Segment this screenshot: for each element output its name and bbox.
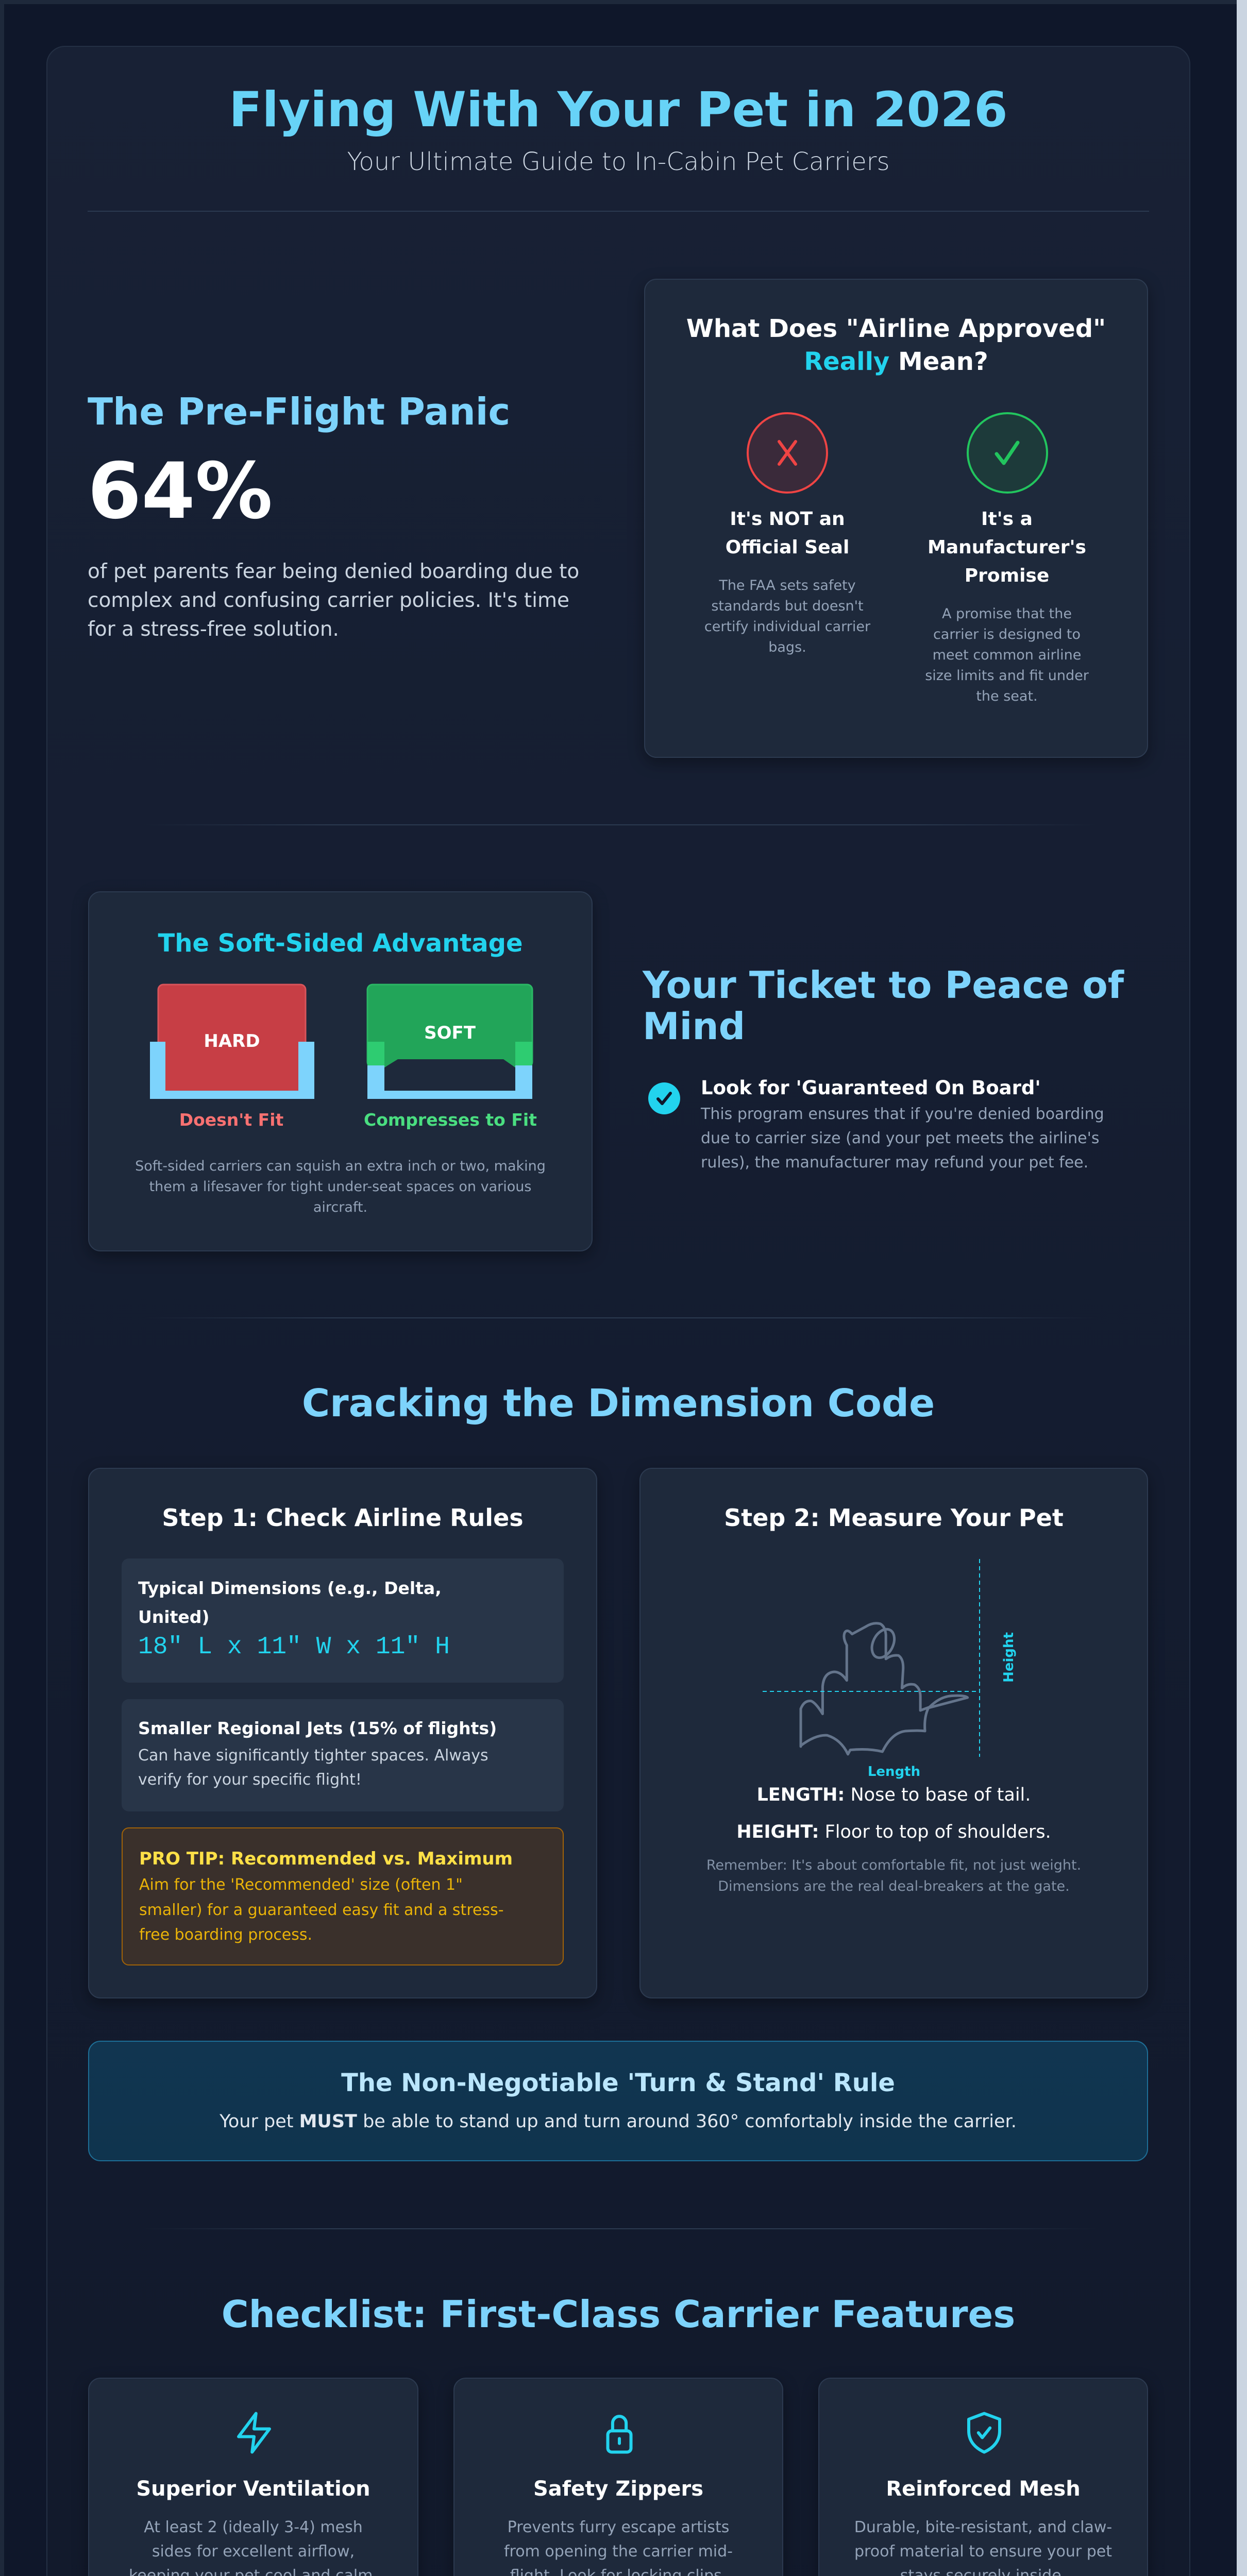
column: manufacturer's promise: the seat.	[976, 688, 1038, 704]
panel: safety zippers: from opening the carrier mid-	[504, 2543, 733, 2561]
heading: Step 1: Check Airline Rules	[162, 1504, 524, 1532]
box: typical dimensions: United)	[138, 1607, 209, 1627]
panel: safety zippers	[453, 2378, 783, 2576]
label: compresses to fit: Compresses to Fit	[364, 1110, 537, 1130]
stat block: pre-flight panic	[88, 390, 579, 641]
box: typical dimensions	[122, 1558, 564, 1683]
text: measurement instructions: LENGTH: Nose to base of tail.	[757, 1785, 1031, 1805]
heading: Step 2: Measure Your Pet	[724, 1504, 1064, 1532]
item text	[701, 1105, 1104, 1172]
paragraph: of pet parents fear being denied boarding due to	[88, 560, 579, 583]
panel: superior ventilation: At least 2 (ideally 3-4) mesh	[144, 2518, 363, 2536]
box: regional jets	[122, 1699, 564, 1811]
item text: This program ensures that if you're denied boarding	[701, 1105, 1104, 1123]
panel: step 1	[88, 1468, 597, 1998]
description: Soft-sided carriers can squish an extra inch or two, making	[135, 1158, 546, 1174]
heading: The Pre-Flight Panic	[88, 390, 510, 433]
panel: safety zippers: Prevents furry escape artists	[508, 2518, 729, 2536]
column: manufacturer's promise: meet common airline	[933, 647, 1081, 663]
item text: due to carrier size (and your pet meets the airline's	[701, 1129, 1099, 1147]
column: not a seal: The FAA sets safety	[719, 578, 856, 594]
callout: turn & stand rule: The Non-Negotiable 'Turn & Stand' Rule	[341, 2069, 895, 2097]
callout: pro tip: Aim for the 'Recommended' size (often 1"	[139, 1876, 463, 1894]
heading: What Does "Airline Approved"	[686, 314, 1106, 343]
callout: pro tip: free boarding process.	[139, 1926, 312, 1944]
heading: Your Ticket to Peace of	[643, 963, 1124, 1007]
text: measurement instructions: Dimensions are the real deal-breakers at the gate.	[718, 1878, 1070, 1894]
column: not a seal: It's NOT an	[730, 509, 845, 530]
paragraph: complex and confusing carrier policies. It's time	[88, 589, 569, 612]
icon: red x	[747, 412, 828, 494]
panel: airline approved	[644, 279, 1148, 758]
panel: safety zippers: Safety Zippers	[533, 2477, 703, 2501]
icon: shield check	[967, 2412, 1001, 2453]
panel: reinforced mesh: Durable, bite-resistant, and claw-	[854, 2518, 1112, 2536]
text: measurement instructions: HEIGHT: Floor to top of shoulders.	[736, 1822, 1051, 1842]
column: not a seal: standards but doesn't	[711, 598, 864, 614]
heading: Mind	[643, 1005, 745, 1048]
subtitle: Your Ultimate Guide to In-Cabin Pet Carriers	[347, 147, 889, 176]
box: regional jets: verify for your specific flight!	[138, 1771, 362, 1789]
box: typical dimensions: Typical Dimensions (e.g., Delta,	[138, 1578, 442, 1598]
column: manufacturer's promise	[925, 509, 1089, 704]
description: aircraft.	[313, 1199, 367, 1215]
paragraph	[88, 560, 579, 641]
text: measurement instructions	[706, 1785, 1081, 1894]
column: manufacturer's promise: It's a	[981, 509, 1033, 530]
heading: The Soft-Sided Advantage	[158, 929, 523, 958]
callout: turn & stand rule	[88, 2041, 1148, 2161]
column: manufacturer's promise: carrier is designed to	[933, 626, 1081, 642]
callout: pro tip: PRO TIP: Recommended vs. Maximum	[139, 1849, 513, 1869]
icon: check circle	[648, 1082, 680, 1114]
chart: dog measurement diagram	[763, 1559, 1017, 1780]
box: typical dimensions: 18" L x 11" W x 11" H	[138, 1633, 450, 1661]
callout: pro tip: smaller) for a guaranteed easy fit and a stress-	[139, 1901, 504, 1919]
paragraph: for a stress-free solution.	[88, 618, 339, 641]
column: manufacturer's promise: size limits and fit under	[925, 668, 1089, 684]
big stat: 64%	[88, 447, 273, 536]
item text: rules), the manufacturer may refund your pet fee.	[701, 1154, 1088, 1172]
heading: checklist: Checklist: First-Class Carrier Features	[222, 2293, 1015, 2336]
heading: Really Mean?	[804, 347, 988, 376]
heading	[642, 963, 1124, 1048]
box: regional jets: Can have significantly tighter spaces. Always	[138, 1747, 488, 1765]
chart: dog measurement diagram: Height	[1001, 1632, 1017, 1683]
callout: pro tip	[122, 1827, 564, 1965]
icon: lightning	[237, 2412, 271, 2453]
column: manufacturer's promise: Manufacturer's	[928, 537, 1086, 558]
icon: lock	[606, 2415, 633, 2453]
icon: green check	[967, 412, 1048, 494]
heading: dimension code: Cracking the Dimension Code	[302, 1381, 935, 1426]
panel: superior ventilation: sides for excellent airflow,	[152, 2543, 355, 2561]
panel: step 2	[639, 1468, 1148, 1998]
panel: superior ventilation: Superior Ventilation	[136, 2477, 370, 2501]
description	[135, 1158, 546, 1215]
illustration: hard vs soft carriers	[150, 984, 533, 1099]
column: not a seal: bags.	[768, 639, 806, 655]
panel: reinforced mesh	[818, 2378, 1148, 2576]
title: Flying With Your Pet in 2026	[229, 82, 1008, 138]
column: manufacturer's promise: A promise that the	[942, 606, 1072, 622]
callout: turn & stand rule: Your pet MUST be able to stand up and turn around 360° comfortably inside the carrier.	[220, 2111, 1017, 2132]
block: ticket to peace of mind	[642, 963, 1124, 1172]
description: them a lifesaver for tight under-seat spaces on various	[149, 1179, 531, 1195]
column: not a seal: certify individual carrier	[704, 619, 870, 635]
panel: superior ventilation	[88, 2378, 418, 2576]
panel: soft-sided advantage	[88, 891, 593, 1251]
label: doesn't fit: Doesn't Fit	[179, 1110, 283, 1130]
panel: reinforced mesh: Reinforced Mesh	[886, 2477, 1081, 2501]
chart: dog measurement diagram: Length	[868, 1764, 920, 1780]
column: manufacturer's promise: Promise	[965, 565, 1049, 586]
column: not a seal	[704, 509, 871, 655]
box: regional jets: Smaller Regional Jets (15% of flights)	[138, 1718, 497, 1738]
item title: Look for 'Guaranteed On Board'	[701, 1077, 1041, 1099]
column: not a seal: Official Seal	[726, 537, 849, 558]
illustration: hard vs soft carriers: HARD	[204, 1031, 260, 1052]
heading	[686, 314, 1106, 376]
text: measurement instructions: Remember: It's about comfortable fit, not just weight.	[706, 1857, 1081, 1873]
illustration: hard vs soft carriers: SOFT	[424, 1023, 476, 1043]
panel: reinforced mesh: proof material to ensure your pet	[854, 2543, 1112, 2561]
